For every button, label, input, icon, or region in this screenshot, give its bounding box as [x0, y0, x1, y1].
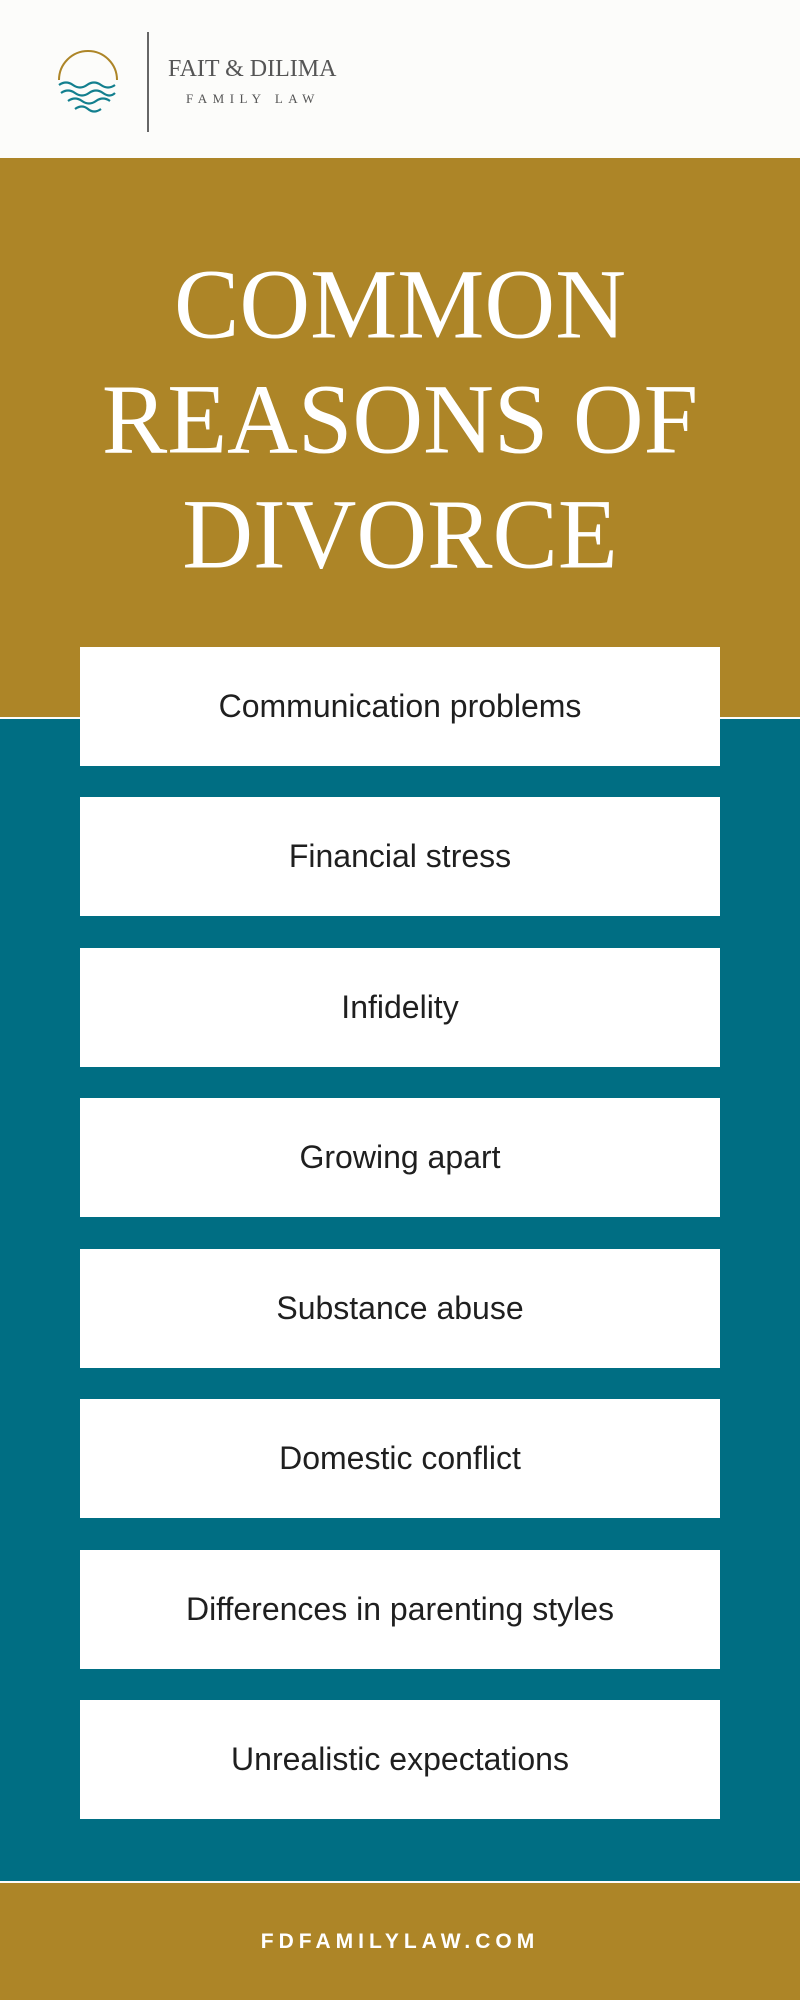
- logo text: FAIT & DILIMA: [168, 56, 336, 82]
- item 1: Communication problems: [219, 688, 581, 724]
- teal section: [0, 719, 800, 1881]
- item 3: [80, 948, 720, 1067]
- item 4: Growing apart: [300, 1139, 500, 1175]
- title: [102, 250, 698, 590]
- title: COMMON: [174, 250, 626, 360]
- title: REASONS OF: [102, 365, 698, 475]
- item 7: [80, 1550, 720, 1669]
- logo text: [168, 56, 336, 106]
- item 3: Infidelity: [341, 989, 459, 1025]
- item 5: [80, 1249, 720, 1368]
- item 4: [80, 1098, 720, 1217]
- header: [0, 0, 800, 158]
- item 6: [80, 1399, 720, 1518]
- item 5: Substance abuse: [276, 1290, 524, 1326]
- item 2: Financial stress: [289, 838, 511, 874]
- icon: logo sun and waves: [58, 50, 118, 113]
- item 8: Unrealistic expectations: [231, 1741, 569, 1777]
- item 8: [80, 1700, 720, 1819]
- footer: FDFAMILYLAW.COM: [261, 1930, 539, 1952]
- gold title section: [0, 158, 800, 717]
- item 6: Domestic conflict: [279, 1440, 521, 1476]
- item 1: [80, 647, 720, 766]
- logo text: FAMILY LAW: [186, 91, 320, 106]
- footer: [0, 1883, 800, 2000]
- item 7: Differences in parenting styles: [186, 1591, 614, 1627]
- item 2: [80, 797, 720, 916]
- title: DIVORCE: [182, 480, 618, 590]
